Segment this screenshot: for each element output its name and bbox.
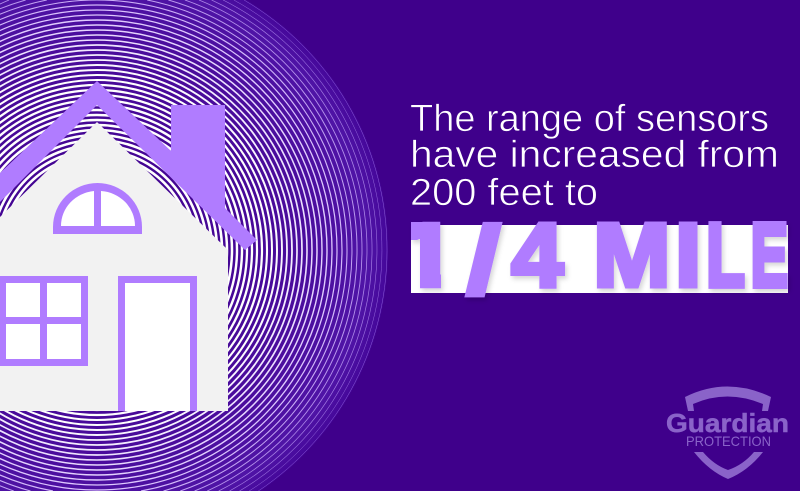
- logo: Guardian Protection: [666, 386, 789, 479]
- big figure: I: [675, 204, 701, 306]
- chimney and roof: [0, 81, 257, 250]
- headline text: 200 feet to: [410, 172, 598, 214]
- shield bottom: [694, 452, 763, 479]
- headline text: The range of sensors: [410, 98, 769, 140]
- big figure: 1: [398, 205, 458, 306]
- house body: [0, 122, 228, 411]
- white bar: [411, 225, 788, 293]
- shield top: [685, 386, 771, 411]
- big figure: 4: [512, 205, 563, 306]
- concentric signal rings: [0, 0, 388, 491]
- arched attic window: [53, 183, 142, 234]
- big figure: M: [593, 205, 670, 306]
- big figure: [411, 221, 790, 301]
- big figure: E: [751, 204, 788, 305]
- four-pane window: [0, 276, 88, 366]
- big figure: L: [706, 206, 745, 306]
- logo wordmark: Guardian: [666, 408, 789, 438]
- icon: house: [0, 81, 257, 411]
- highlight: 1/4 mile: [411, 221, 790, 301]
- headline text: [410, 98, 779, 214]
- logo subtitle: PROTECTION: [686, 433, 771, 449]
- headline text: have increased from: [410, 134, 779, 176]
- door: [118, 276, 197, 411]
- big figure: /: [466, 208, 501, 314]
